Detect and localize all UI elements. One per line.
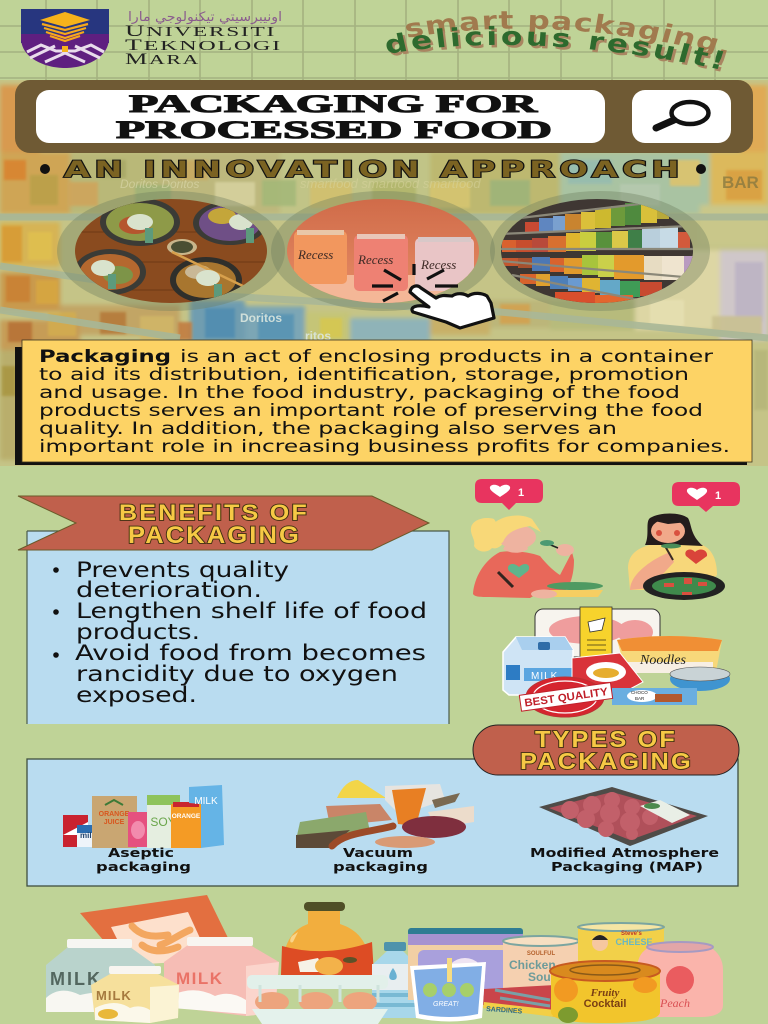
fruit cocktail can: [550, 961, 660, 1023]
illustration: packaged products pile: CHOCO: [631, 690, 648, 695]
panel: benefits: [18, 496, 449, 724]
panel: intro: [15, 340, 752, 465]
label: aseptic: Aseptic: [108, 845, 174, 860]
milk carton pink: [164, 937, 279, 1016]
slogan: smart packaging,: [406, 11, 727, 55]
university name: [125, 10, 282, 68]
icon: like bubble right: [672, 482, 740, 512]
chicken soup can: Chicken: [509, 958, 556, 972]
benefits heading banner: [18, 496, 429, 550]
chips bag: [80, 895, 229, 965]
background photo: supermarket shelves: BAR: [722, 173, 759, 192]
chicken soup can: SOULFUL: [527, 951, 555, 957]
benefits list: deterioration.: [76, 578, 262, 602]
illustration: woman with dark hair eating: [628, 514, 725, 600]
icon: aseptic packaging cartons: ORANGE: [172, 813, 201, 820]
milk carton pink: MILK: [176, 969, 224, 988]
juice pouch: GREAT!: [433, 1001, 459, 1008]
icon: like bubble right: 1: [715, 490, 721, 502]
illustration: packaged products pile: BAR: [635, 696, 645, 701]
icon: aseptic packaging cartons: milk: [80, 831, 97, 840]
types heading pill: [473, 725, 739, 775]
icon: click hand: [372, 264, 494, 328]
illustration: woman with blonde hair eating: [471, 515, 603, 598]
label: vacuum: packaging: [333, 859, 428, 874]
illustration: packaged products pile: Noodles: [639, 653, 686, 668]
background photo: supermarket shelves: Doritos Doritos: [120, 177, 199, 191]
icon: aseptic packaging cartons: SOY: [150, 815, 176, 829]
illustration: packaged products pile: [503, 607, 730, 717]
icon: magnifying glass: [656, 102, 708, 128]
juice pouch: [410, 958, 486, 1022]
photo: drink cans: Recess: [357, 252, 393, 267]
lavender tub: [408, 928, 523, 1000]
intro text: products serves an important role of preserving the food: [39, 401, 703, 420]
title text: PACKAGING FOR: [129, 91, 539, 118]
label: vacuum: Vacuum: [343, 845, 413, 860]
university name: T EKNOLOGI: [125, 37, 282, 54]
types heading pill: PACKAGING: [520, 748, 693, 774]
icon: vacuum packed foods: [296, 780, 474, 848]
benefits list: Avoid food from becomes: [75, 641, 426, 665]
yellow can: [578, 923, 664, 967]
university name: U NIVERSITI: [125, 23, 276, 40]
photo: drink cans: Recess: [297, 247, 333, 262]
icon: aseptic packaging cartons: JUICE: [104, 819, 125, 826]
title text: PROCESSED FOOD: [116, 117, 552, 144]
chicken soup can: Soup: [528, 970, 558, 984]
yellow can: Steve's: [621, 931, 642, 937]
photo: food bowls: [75, 199, 267, 303]
label: aseptic: packaging: [96, 859, 191, 874]
intro text: Packaging: [39, 347, 171, 366]
logo: UiTM crest: [21, 9, 109, 68]
illustration: bottom grocery row: [46, 895, 723, 1024]
subtitle: AN INNOVATION APPROACH: [64, 158, 684, 183]
slogan: delicious result!: [390, 28, 726, 72]
background photo: supermarket shelves: ritos: [305, 329, 331, 343]
icon: modified atmosphere meat tray: [539, 787, 708, 846]
benefits list: Prevents quality: [76, 558, 289, 582]
water bottle: [372, 942, 417, 1018]
photo: drink cans: Recess: [420, 257, 456, 272]
intro text: is an act of enclosing products in a container: [180, 347, 713, 366]
illustration: packaged products pile: MILK: [531, 671, 558, 682]
milk carton grey: [46, 939, 155, 1012]
icon: aseptic packaging cartons: ORANGE: [99, 811, 130, 818]
slogan: delicious result!: [386, 26, 724, 69]
yellow can: CHEESE: [615, 937, 653, 947]
label: modified atmosphere: Packaging (MAP): [551, 859, 703, 874]
benefits list: exposed.: [76, 683, 197, 707]
sardines tin: [483, 985, 555, 1017]
photo circle rings: [57, 191, 710, 311]
milk carton grey: MILK: [50, 969, 102, 989]
label: modified atmosphere: Modified Atmosphere: [530, 845, 719, 860]
fruit cocktail can: Cocktail: [584, 998, 626, 1010]
illustration: packaged products pile: BEST QUALITY: [524, 686, 609, 710]
subtitle: [40, 158, 706, 183]
types heading pill: TYPES OF: [535, 726, 677, 752]
benefits heading banner: BENEFITS OF: [119, 500, 309, 525]
intro text: [39, 347, 730, 456]
peach soda can: Peach: [659, 996, 690, 1010]
icon: like bubble left: [475, 479, 543, 510]
benefits list: Lengthen shelf life of food: [76, 599, 427, 623]
benefits list: products.: [76, 620, 200, 644]
juice bottle: [281, 902, 374, 975]
intro text: to aid its distribution, identification, storage, promotion: [39, 365, 689, 384]
label: aseptic: [96, 845, 191, 874]
label: vacuum: [333, 845, 428, 874]
panel: types of packaging: [27, 759, 738, 886]
intro text: and usage. In the food industry, packaging of the food: [39, 383, 680, 402]
intro text: important role in increasing business profits for companies.: [39, 437, 730, 456]
benefits heading banner: PACKAGING: [128, 522, 301, 549]
label: modified atmosphere: [530, 845, 719, 874]
fruit cocktail can: Fruity: [590, 987, 619, 999]
university name: اونيبرسيتي تيكنولوجي مارا: [128, 10, 282, 25]
background photo: supermarket shelves: [0, 80, 768, 466]
header grid pattern: [0, 0, 768, 80]
benefits list: rancidity due to oxygen: [76, 662, 398, 686]
title bar: [15, 80, 753, 153]
photo: drink cans: [287, 199, 479, 303]
icon: like bubble left: 1: [518, 487, 524, 499]
chicken soup can: [503, 936, 580, 990]
shelf product texture: [2, 160, 768, 410]
icon: aseptic packaging cartons: MILK: [194, 796, 218, 807]
icon: aseptic packaging cartons: [63, 785, 224, 848]
background photo: supermarket shelves: Doritos: [240, 311, 282, 325]
milk carton yellow: [91, 966, 179, 1023]
sardines tin: SARDINES: [486, 1006, 523, 1016]
benefits list: [53, 558, 427, 707]
background photo: supermarket shelves: smartfood smartfood smartfood: [300, 176, 481, 191]
intro text: quality. In addition, the packaging also serves an: [39, 419, 617, 438]
title text: [116, 91, 552, 144]
milk carton yellow: MILK: [96, 988, 132, 1003]
shelf edges: [0, 217, 768, 338]
photo: snack shelves: [501, 199, 693, 303]
click burst lines: [372, 264, 458, 301]
peach soda can: [637, 942, 723, 1017]
university name: M ARA: [125, 51, 200, 68]
egg carton: [247, 975, 388, 1024]
